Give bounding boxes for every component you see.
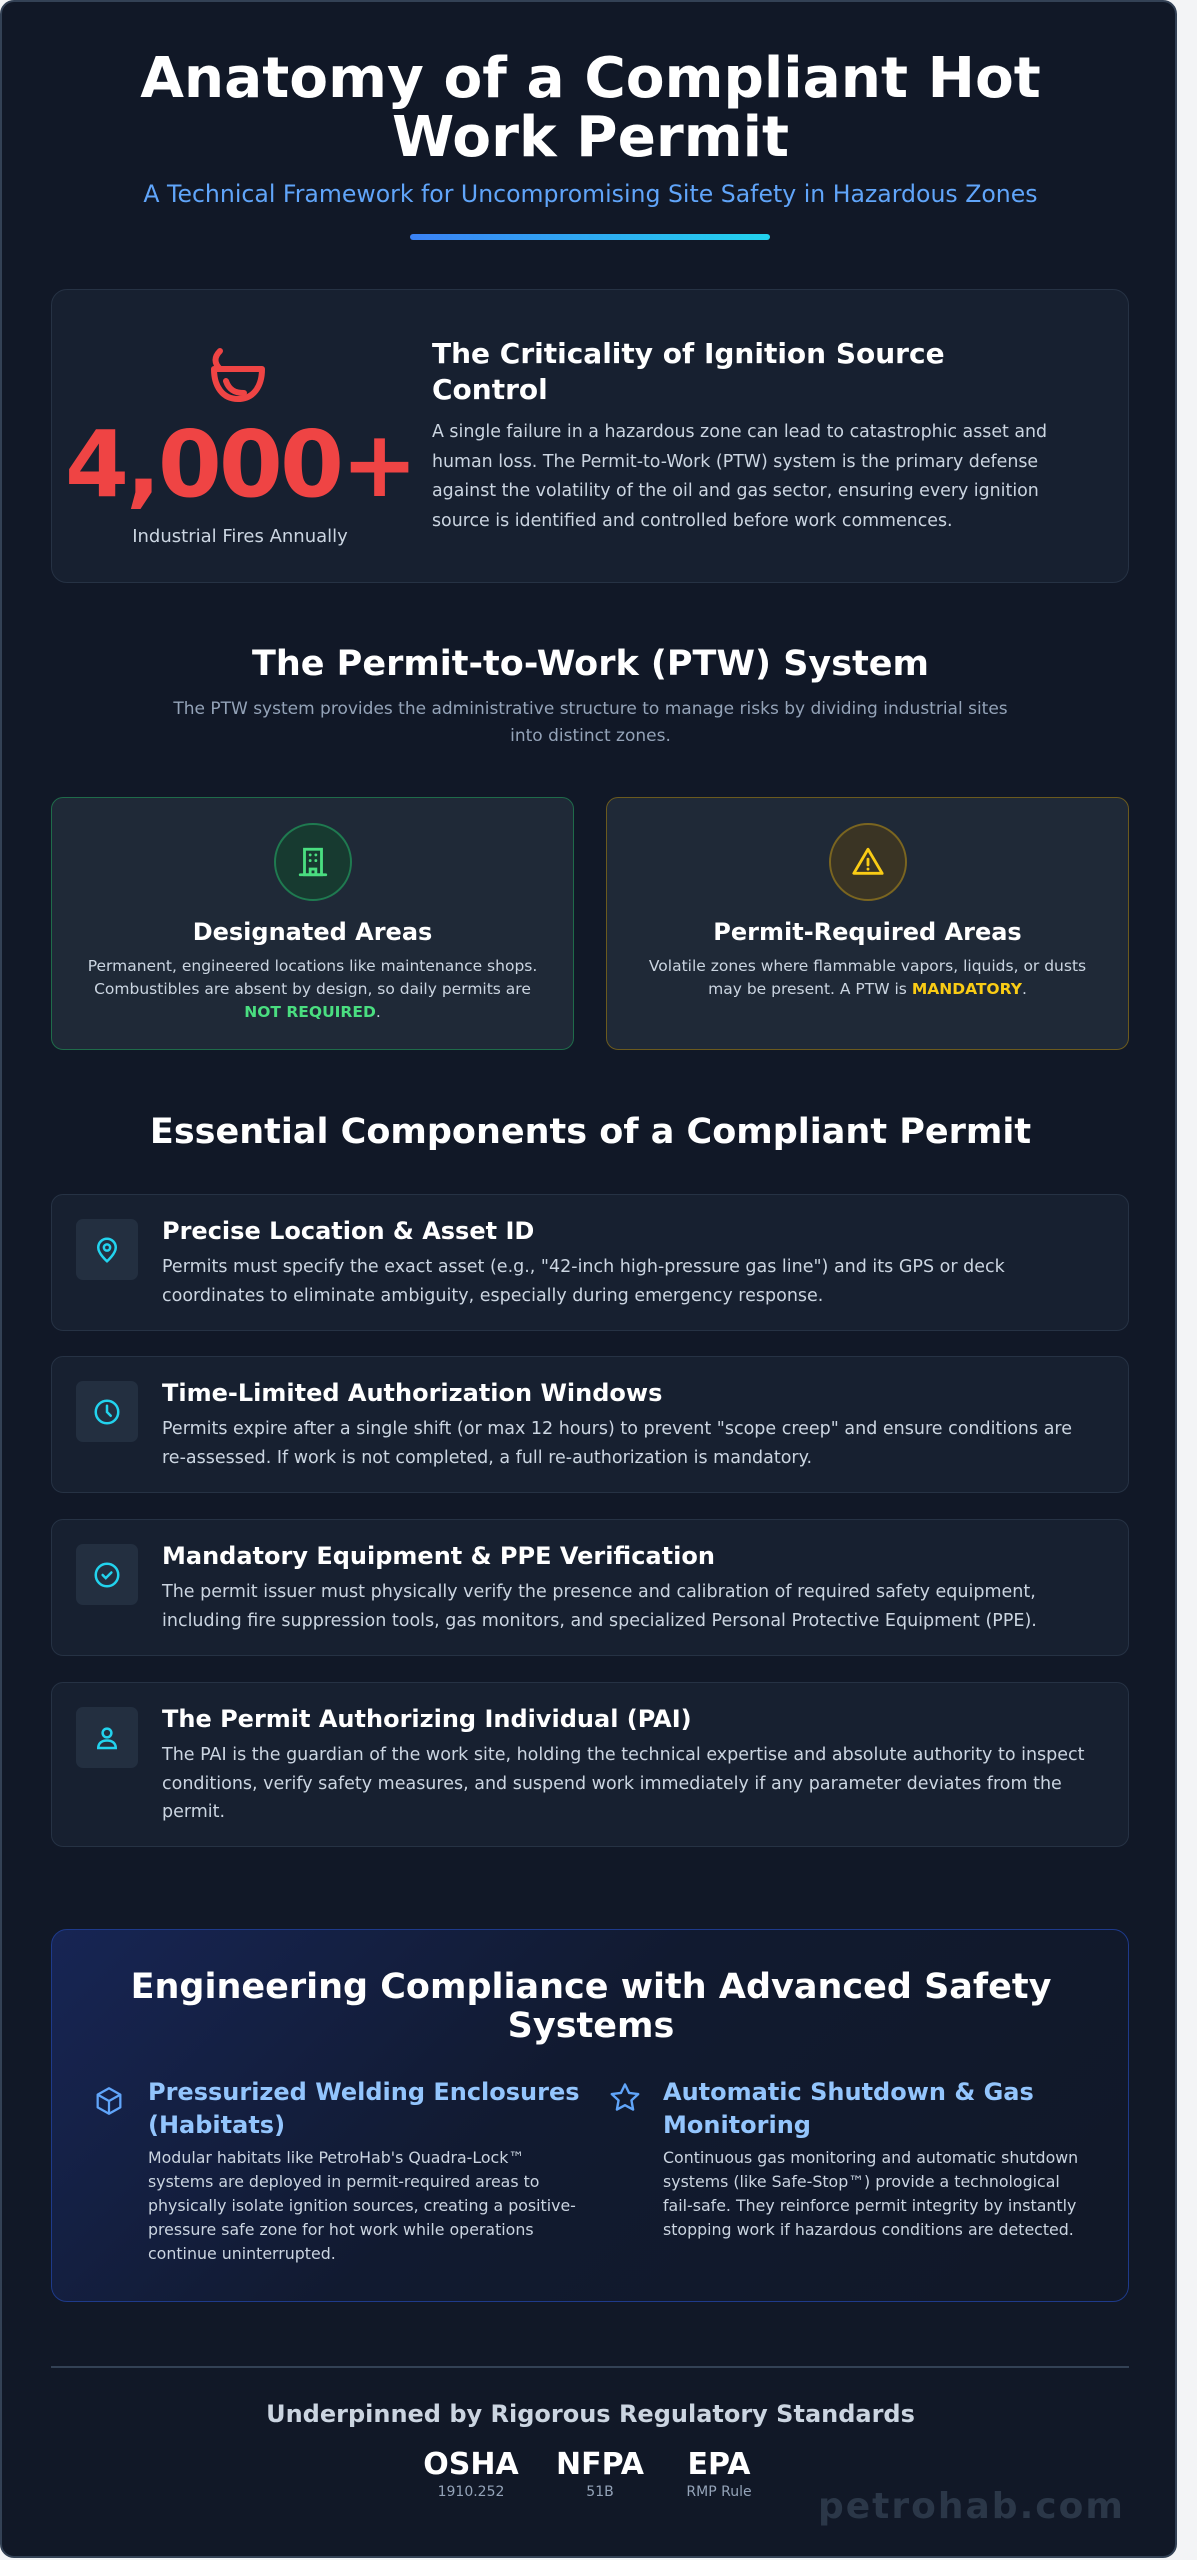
panel: PAI (51, 1682, 1129, 1847)
panel: designated areas: Designated Areas (193, 918, 432, 946)
icon: clock (76, 1381, 138, 1442)
panel: engineering compliance (51, 1929, 1129, 2302)
icon: pin (76, 1219, 138, 1280)
panel: PAI: permit. (162, 1802, 225, 1822)
icon: check (76, 1544, 138, 1605)
stat number: 4,000+ (65, 411, 415, 518)
standards list: OSHA (423, 2447, 519, 2482)
heading: The Criticality of Ignition Source Control (432, 337, 945, 406)
standards list: NFPA (556, 2447, 644, 2482)
title: Anatomy of a Compliant Hot (140, 46, 1041, 111)
heading: standards: Underpinned by Rigorous Regulatory Standards (266, 2400, 915, 2428)
heading: Systems (508, 2006, 674, 2046)
panel: permit-required areas (606, 797, 1129, 1050)
item: shutdown: Continuous gas monitoring and automatic shutdown systems (like Safe-Stop™) provide a technological fail-safe. They reinforce permit integrity by instantly stopping work if hazardous conditions are detected. (663, 2148, 1078, 2239)
watermark: petrohab.com (818, 2486, 1125, 2527)
item: shutdown (610, 2078, 1078, 2239)
icon: building (274, 823, 352, 901)
text block: A single failure in a hazardous zone can lead to catastrophic asset and human loss. The Permit-to-Work (PTW) system is the primary defense against the volatility of the oil and gas sector, ensuring every ignition source is identified and controlled before work commences. (432, 422, 1047, 530)
panel: time-limited: re-assessed. If work is not completed, a full re-authorization is mandatory. (162, 1448, 812, 1468)
text block: PTW description: The PTW system provides the administrative structure to manage risks by dividing industrial sites (173, 699, 1008, 719)
heading: Engineering Compliance with Advanced Safety (131, 1967, 1051, 2007)
item: shutdown: Automatic Shutdown & Gas Monitoring (663, 2078, 1034, 2139)
panel: location: Precise Location & Asset ID (162, 1217, 534, 1245)
standards list: 1910.252 (438, 2484, 504, 2500)
title (140, 46, 1041, 170)
icon: person (76, 1707, 138, 1768)
panel: PAI: The Permit Authorizing Individual (PAI) (162, 1705, 692, 1733)
panel: PAI: conditions, verify safety measures, and suspend work immediately if any parameter deviates from the (162, 1774, 1062, 1794)
panel: location: coordinates to eliminate ambiguity, especially during emergency response. (162, 1286, 823, 1306)
heading: essential components: Essential Components of a Compliant Permit (150, 1112, 1031, 1152)
icon: cube (96, 2087, 122, 2115)
item: habitats (96, 2078, 580, 2263)
panel: location (51, 1194, 1129, 1331)
accent bar (410, 234, 770, 240)
item: habitats: Pressurized Welding Enclosures (Habitats) (148, 2078, 580, 2139)
panel: ignition stat (51, 289, 1129, 583)
text block: PTW description (173, 699, 1008, 746)
panel: permit-required areas: Volatile zones where flammable vapors, liquids, or dusts may be present. A PTW is MANDATORY. (649, 957, 1086, 998)
text block: PTW description: into distinct zones. (510, 726, 671, 746)
icon: star (610, 2083, 640, 2111)
item: habitats: Modular habitats like PetroHab's Quadra-Lock™ systems are deployed in permit-required areas to physically isolate ignition sources, creating a positive-pressure safe zone for hot work while operations continue uninterrupted. (148, 2148, 576, 2263)
standards list (423, 2447, 752, 2500)
subtitle: A Technical Framework for Uncompromising Site Safety in Hazardous Zones (143, 180, 1038, 208)
panel: designated areas: Permanent, engineered locations like maintenance shops. Combustibles are absent by design, so daily permits are NOT REQUIRED. (88, 957, 537, 1021)
standards list: EPA (688, 2447, 750, 2482)
standards list: RMP Rule (686, 2484, 752, 2500)
panel: designated areas (51, 797, 574, 1050)
panel: PAI: The PAI is the guardian of the work site, holding the technical expertise and absolute authority to inspect (162, 1745, 1085, 1765)
panel: PPE: The permit issuer must physically verify the presence and calibration of required safety equipment, (162, 1582, 1036, 1602)
panel: time-limited (51, 1356, 1129, 1493)
heading: PTW system: The Permit-to-Work (PTW) System (252, 644, 929, 684)
panel: PPE (51, 1519, 1129, 1656)
title: Work Permit (392, 105, 789, 170)
panel: permit-required areas: Permit-Required Areas (713, 918, 1022, 946)
panel: time-limited: Permits expire after a single shift (or max 12 hours) to prevent "scope creep" and ensure conditions are (162, 1419, 1072, 1439)
panel: location: Permits must specify the exact asset (e.g., "42-inch high-pressure gas line") and its GPS or deck (162, 1257, 1005, 1277)
panel: PPE: Mandatory Equipment & PPE Verification (162, 1542, 715, 1570)
panel: time-limited: Time-Limited Authorization Windows (162, 1379, 662, 1407)
icon: fire (211, 348, 265, 402)
icon: warning (829, 823, 907, 901)
stat label: Industrial Fires Annually (132, 526, 348, 547)
heading (131, 1967, 1051, 2046)
standards list: 51B (586, 2484, 614, 2500)
panel: PPE: including fire suppression tools, gas monitors, and specialized Personal Protective Equipment (PPE). (162, 1610, 1037, 1630)
